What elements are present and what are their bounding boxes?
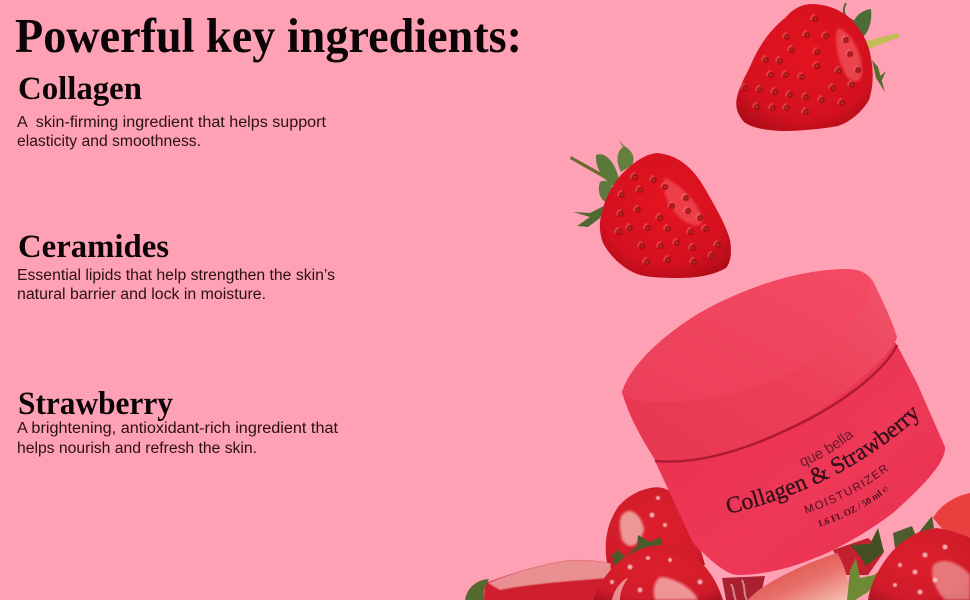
heading: strawberry: Strawberry xyxy=(18,386,173,422)
text: collagen description: elasticity and smoothness. xyxy=(17,133,201,150)
jar seam xyxy=(655,345,897,462)
ingredient: strawberry xyxy=(17,386,339,457)
label: brand: que bella xyxy=(800,432,854,468)
ingredient: ceramides xyxy=(17,229,335,303)
text: collagen description: A skin-firming ingredient that helps support xyxy=(17,114,327,131)
lid top face xyxy=(622,269,871,403)
text: collagen description xyxy=(17,114,327,150)
front right strawberry xyxy=(868,528,970,600)
calyx back xyxy=(612,535,662,566)
back left strawberry xyxy=(606,487,705,575)
heading: ceramides: Ceramides xyxy=(18,229,169,265)
ingredient: collagen xyxy=(17,71,327,150)
highlight lattice xyxy=(620,511,644,546)
jar body xyxy=(652,335,945,575)
icon: middle strawberry xyxy=(570,139,731,278)
text: strawberry description xyxy=(17,420,339,457)
calyx back right xyxy=(850,528,884,566)
title: Powerful key ingredients: xyxy=(15,8,522,63)
halved strawberry left xyxy=(484,560,611,600)
text: strawberry description: A brightening, antioxidant-rich ingredient that xyxy=(17,420,339,437)
small back strawberries xyxy=(722,576,765,600)
green leaf xyxy=(847,558,897,600)
strawberries pile xyxy=(465,487,970,600)
label: product name: Collagen & Strawberry xyxy=(726,406,918,513)
heading: collagen: Collagen xyxy=(18,71,142,107)
text: ceramides description xyxy=(17,267,335,303)
halved strawberry flesh xyxy=(488,560,611,590)
halved strawberry right xyxy=(748,553,849,600)
text: strawberry description: helps nourish and refresh the skin. xyxy=(17,440,257,457)
label: moisturizer: MOISTURIZER xyxy=(804,465,888,514)
front centre strawberry xyxy=(593,545,723,600)
slice right top xyxy=(933,493,970,545)
white lattice xyxy=(932,561,970,600)
calyx left xyxy=(465,579,489,600)
moisturizer jar xyxy=(622,269,945,575)
calyx right xyxy=(893,516,934,548)
label: size: 1.6 FL OZ / 50 ml ℮ xyxy=(818,487,888,527)
text: ceramides description: Essential lipids that help strengthen the skin’s xyxy=(17,267,335,284)
jar lid xyxy=(622,269,897,460)
text: ceramides description: natural barrier and lock in moisture. xyxy=(17,286,266,303)
icon: top strawberry xyxy=(736,3,900,131)
